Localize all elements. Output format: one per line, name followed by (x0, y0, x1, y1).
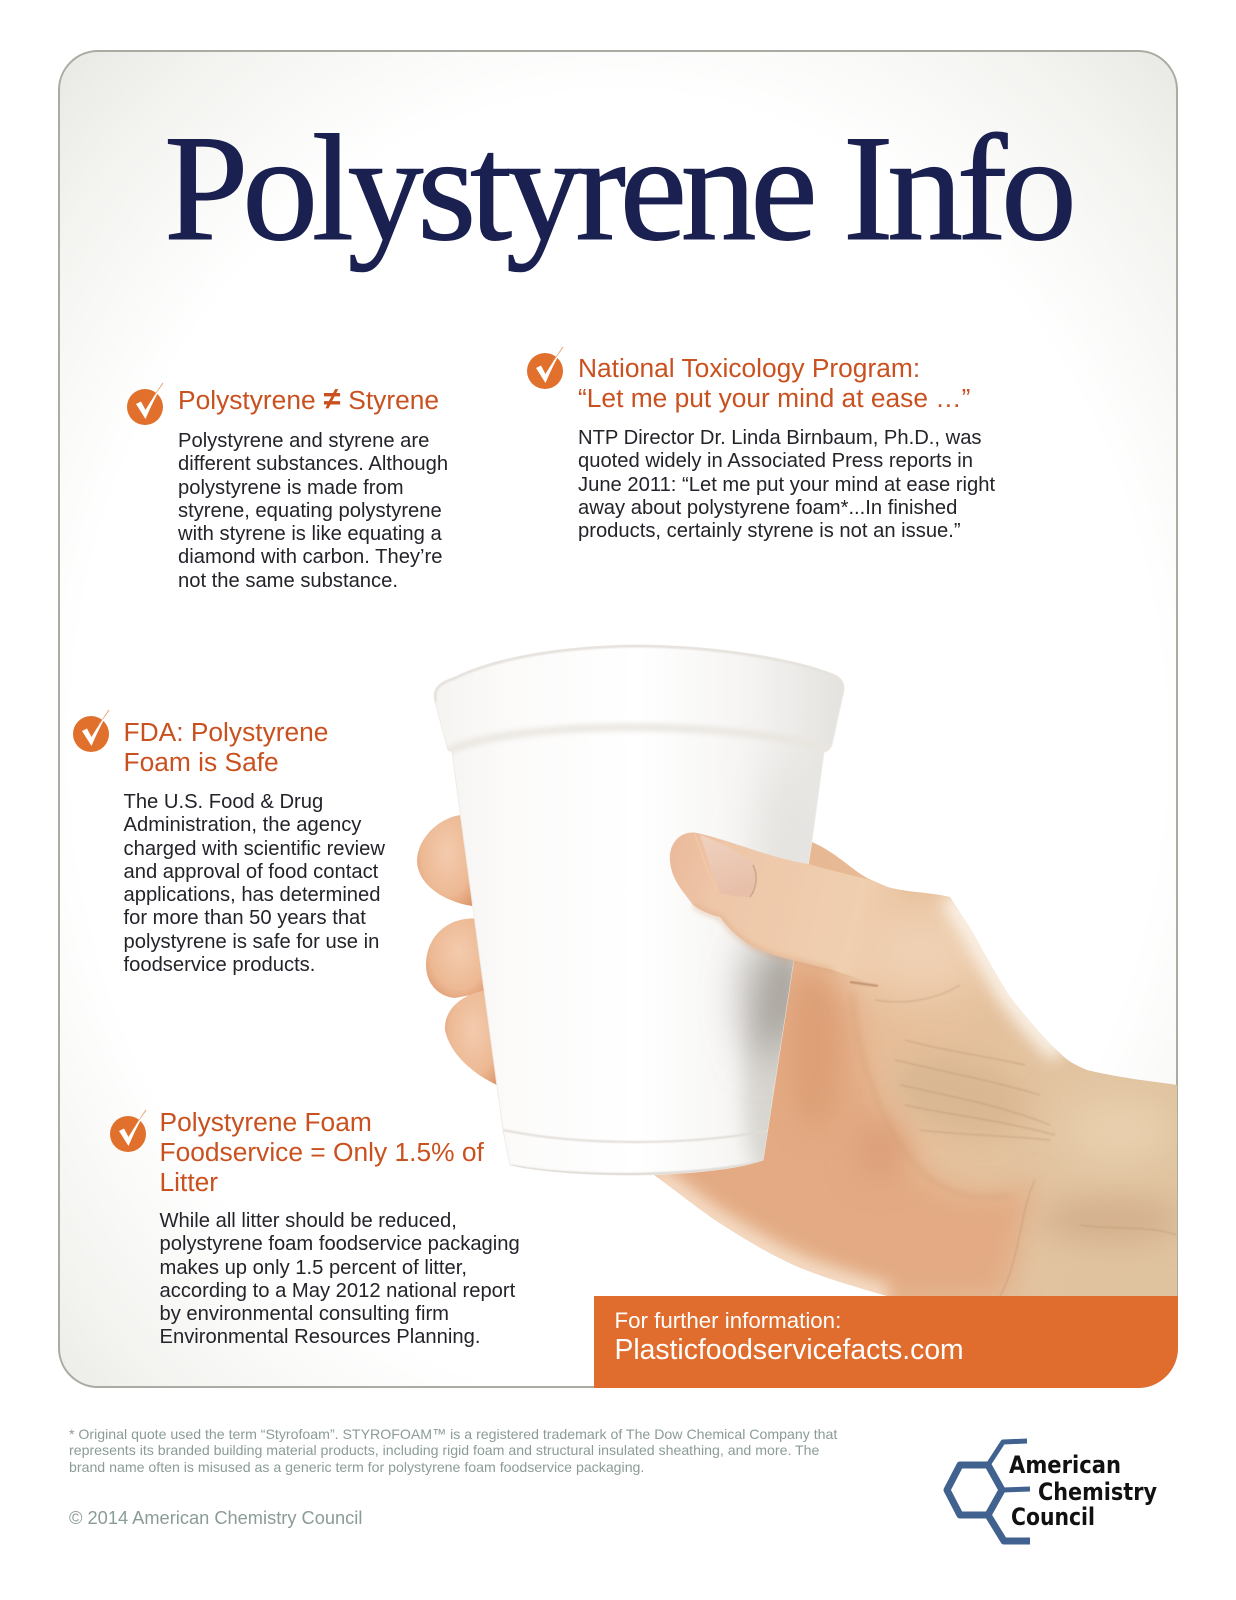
footnote: represents its branded building material products, including rigid foam and structural insulated sheathing, and more. The (69, 1442, 819, 1458)
footnote: * Original quote used the term “Styrofoam”. STYROFOAM™ is a registered trademark of The Dow Chemical Company that (69, 1426, 837, 1442)
heading: national toxicology program: National Toxicology Program: (578, 353, 920, 383)
fingers (417, 815, 497, 1085)
text: fda: foodservice products. (124, 954, 315, 976)
text: litter: While all litter should be reduced, (160, 1210, 457, 1232)
icon: check mark 1 (127, 382, 164, 425)
skin creases (875, 985, 1177, 1296)
palm and wrist (640, 830, 1180, 1300)
thumb (670, 833, 915, 985)
logo wordmark: Council (1011, 1503, 1095, 1531)
heading: national toxicology program (578, 353, 970, 413)
text: fda: for more than 50 years that (124, 907, 366, 929)
thenar and palm shading (640, 960, 1035, 1300)
text: litter: according to a May 2012 national report (160, 1280, 515, 1302)
text: fda (124, 791, 385, 976)
text: polystyrene vs styrene: not the same substance. (178, 570, 398, 592)
text: fda: Administration, the agency (124, 814, 361, 836)
text: national toxicology program: NTP Director Dr. Linda Birnbaum, Ph.D., was (578, 427, 982, 449)
logo hexagon mark (947, 1441, 1030, 1541)
background panel (58, 50, 1178, 1388)
text: polystyrene vs styrene: with styrene is like equating a (178, 523, 442, 545)
heading: fda: Foam is Safe (124, 747, 279, 777)
footnote (69, 1426, 838, 1475)
icon: check mark 3 (73, 710, 110, 752)
text: polystyrene vs styrene: different substances. Although (178, 453, 448, 475)
logo: American Chemistry Council (944, 1438, 1157, 1544)
illustration: hand holding foam cup (417, 644, 1177, 1296)
text: fda: charged with scientific review (124, 838, 385, 860)
logo wordmark (1009, 1451, 1157, 1531)
icon: check mark 2 (527, 346, 564, 389)
heading: litter: Foodservice = Only 1.5% of (160, 1137, 484, 1167)
footnote: brand name often is misused as a generic term for polystyrene foam foodservice packaging. (69, 1459, 644, 1475)
copyright: © 2014 American Chemistry Council (69, 1507, 362, 1528)
text: national toxicology program (578, 427, 995, 542)
heading: fda: FDA: Polystyrene (124, 717, 328, 747)
heading: fda (124, 717, 328, 777)
text: fda: and approval of food contact (124, 861, 378, 883)
logo wordmark: Chemistry (1038, 1478, 1157, 1506)
text: national toxicology program: away about polystyrene foam*...In finished (578, 497, 957, 519)
text: litter: Environmental Resources Planning. (160, 1326, 480, 1348)
text: litter: polystyrene foam foodservice packaging (160, 1233, 520, 1255)
banner url: Plasticfoodservicefacts.com (614, 1333, 964, 1365)
logo wordmark: American (1009, 1451, 1121, 1479)
text: fda: polystyrene is safe for use in (124, 931, 379, 953)
text: fda: applications, has determined (124, 884, 380, 906)
text: polystyrene vs styrene: Polystyrene and styrene are (178, 430, 429, 452)
title: Polystyrene Info (164, 104, 1071, 272)
text: litter: makes up only 1.5 percent of litter, (160, 1257, 467, 1279)
text: national toxicology program: products, certainly styrene is not an issue.” (578, 520, 961, 542)
text: polystyrene vs styrene: diamond with carbon. They’re (178, 546, 442, 568)
text: litter (160, 1210, 520, 1348)
text: fda: The U.S. Food & Drug (124, 791, 323, 813)
icon: check mark 4 (110, 1110, 146, 1152)
foam cup (434, 645, 844, 1180)
text: litter: by environmental consulting firm (160, 1303, 449, 1325)
text: national toxicology program: June 2011: “Let me put your mind at ease right (578, 474, 995, 496)
heading: litter (160, 1107, 484, 1197)
heading: litter: Polystyrene Foam (160, 1107, 372, 1137)
heading: polystyrene vs styrene: Polystyrene Styrene (178, 385, 439, 415)
heading: national toxicology program: “Let me put your mind at ease …” (578, 383, 970, 413)
text: polystyrene vs styrene: styrene, equating polystyrene (178, 500, 442, 522)
call to action banner (594, 1296, 1178, 1388)
text: polystyrene vs styrene (178, 430, 448, 592)
text: national toxicology program: quoted widely in Associated Press reports in (578, 450, 973, 472)
text: polystyrene vs styrene: polystyrene is made from (178, 477, 404, 499)
heading: litter: Litter (160, 1167, 218, 1197)
banner label: For further information: (614, 1308, 841, 1333)
heading: polystyrene vs styrene: ≠ (323, 381, 340, 416)
